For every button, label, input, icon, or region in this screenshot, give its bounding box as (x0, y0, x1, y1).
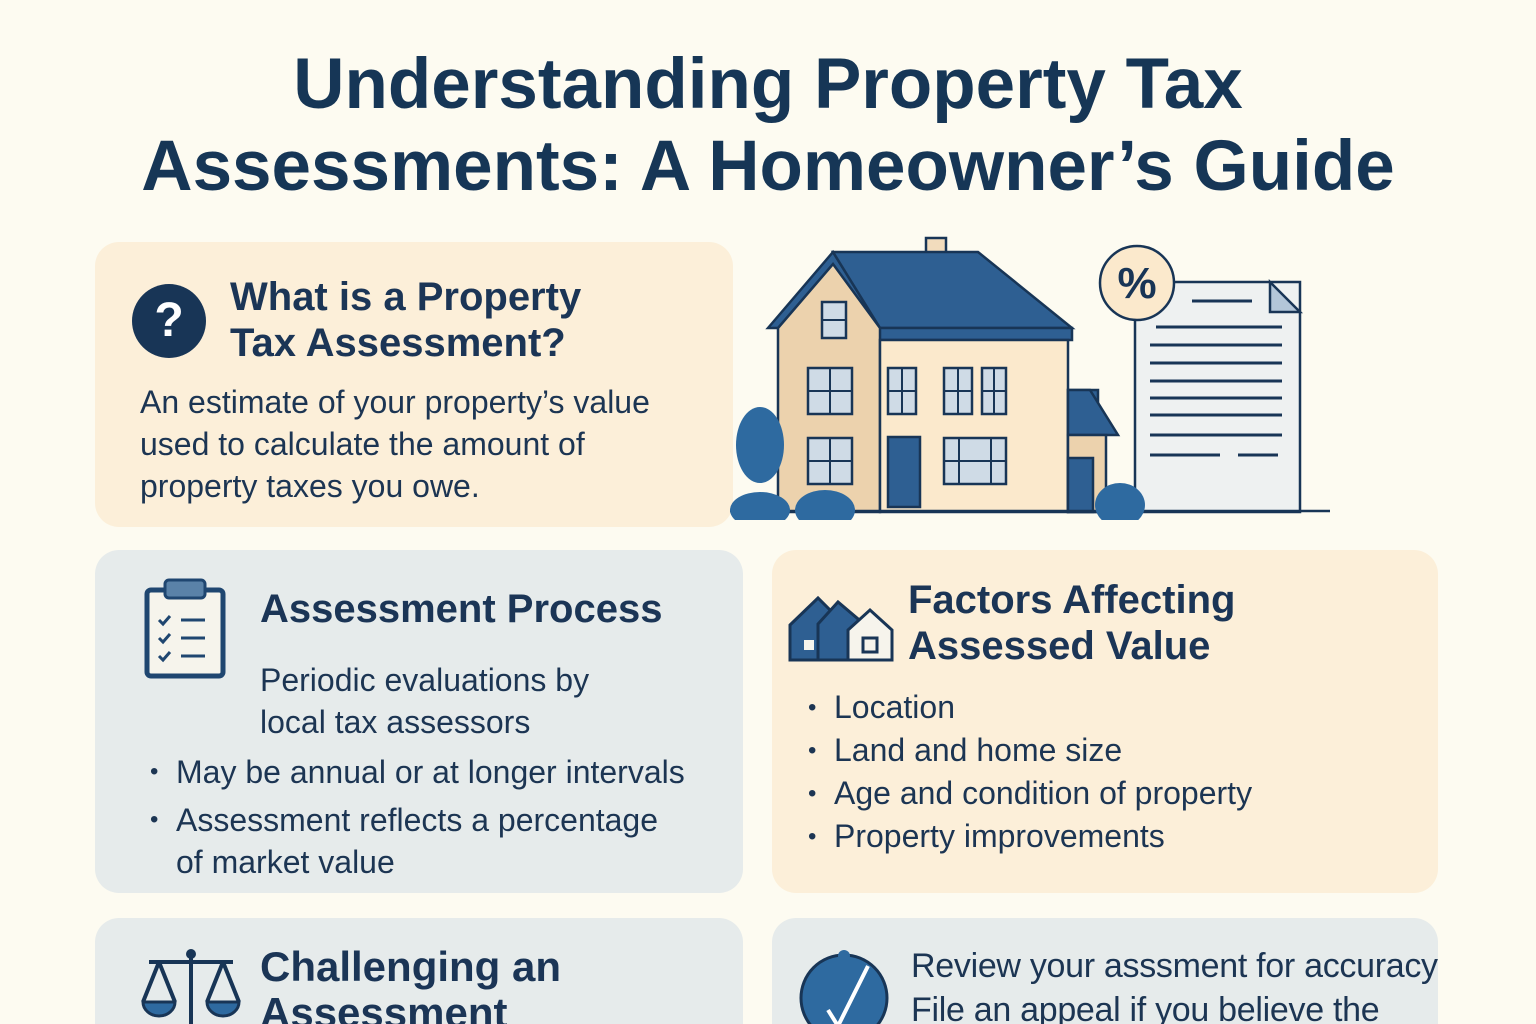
icon: scales (141, 949, 241, 1024)
icon: question: ? (154, 294, 184, 347)
text (911, 947, 1438, 1024)
text: local tax assessors (260, 704, 530, 740)
icon: check (800, 950, 888, 1024)
title: Understanding Property Tax (293, 45, 1243, 124)
illustration: house and document (730, 236, 1330, 520)
text (260, 662, 589, 740)
text: Review your asssment for accuracy (911, 947, 1438, 985)
title (141, 45, 1395, 206)
heading: Assessed Value (908, 624, 1210, 668)
panel: what is (95, 242, 733, 527)
icon: houses (788, 596, 894, 662)
text: An estimate of your property’s value (140, 384, 650, 420)
illustration: house and document: % (1117, 259, 1157, 308)
bullets: Location (834, 689, 955, 725)
bullets: May be annual or at longer intervals (176, 754, 685, 790)
heading: Factors Affecting (908, 578, 1235, 622)
bullets: Land and home size (834, 732, 1122, 768)
panel: assessment process (95, 550, 743, 893)
bullets: Age and condition of property (834, 775, 1252, 811)
bullets: Property improvements (834, 818, 1165, 854)
heading (260, 943, 561, 1024)
bullets: of market value (176, 844, 395, 880)
heading: Tax Assessment? (230, 321, 566, 365)
panel: review (772, 918, 1438, 1024)
panel: factors (772, 550, 1438, 893)
bullets (808, 689, 1252, 854)
bullets (150, 754, 685, 880)
heading: What is a Property (230, 275, 581, 319)
bullets: Assessment reflects a percentage (176, 802, 658, 838)
icon: clipboard (144, 578, 226, 678)
text: Periodic evaluations by (260, 662, 589, 698)
title: Assessments: A Homeowner’s Guide (141, 127, 1395, 206)
heading: Challenging an (260, 943, 561, 990)
text (140, 384, 650, 504)
icon: question (132, 284, 206, 358)
heading (230, 275, 581, 365)
heading: Assessment Process (260, 587, 662, 631)
text: property taxes you owe. (140, 468, 480, 504)
heading (908, 578, 1235, 668)
text: used to calculate the amount of (140, 426, 585, 462)
panel: challenging (95, 918, 743, 1024)
